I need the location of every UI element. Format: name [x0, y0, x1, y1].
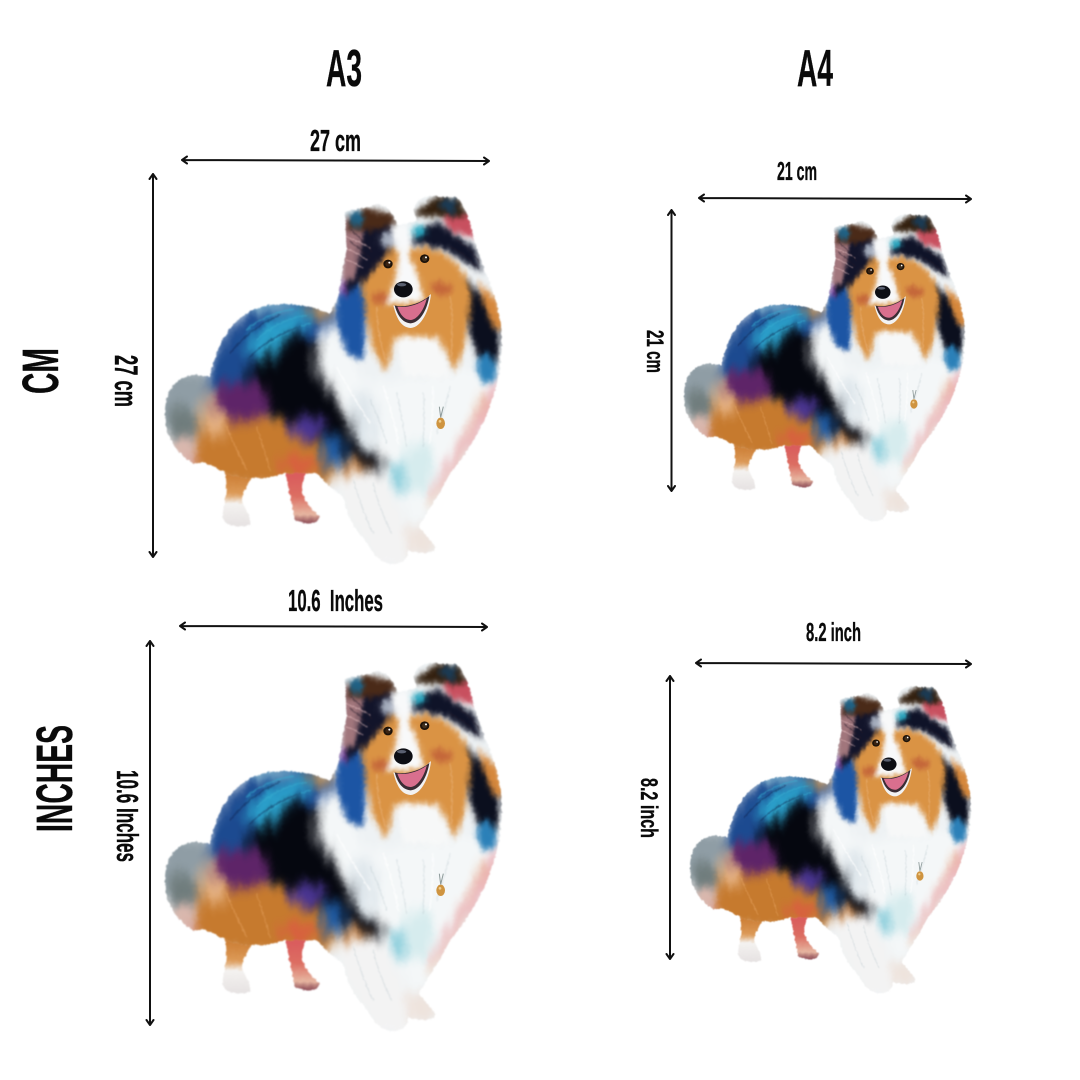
height label: 8.2 inch: 8.2 inch — [635, 778, 662, 838]
height label: 10.6 Inches: 10.6 Inches — [110, 770, 145, 862]
arrow: height — [150, 174, 156, 557]
panel: A3 inches — [110, 583, 510, 1037]
height label: 21 cm: 21 cm — [641, 330, 668, 373]
height label: 27 cm: 27 cm — [108, 355, 144, 407]
illustration: dog A3 cm — [150, 180, 510, 570]
arrow: height — [146, 641, 154, 1025]
illustration: dog A4 inches — [678, 673, 978, 998]
panel: A4 inches — [635, 617, 978, 998]
illustration: dog A4 cm — [672, 201, 972, 526]
arrow: width — [696, 660, 971, 668]
panel: A3 centimetres — [108, 40, 510, 570]
arrow: width — [699, 194, 971, 202]
arrow: height — [668, 210, 675, 491]
heading: A3: A3 — [326, 40, 362, 98]
heading: A4: A4 — [797, 40, 833, 98]
row label: INCHES: INCHES — [26, 725, 83, 832]
panel: A4 centimetres — [641, 40, 972, 526]
row label: CM: CM — [12, 348, 69, 394]
arrow: height — [666, 676, 674, 959]
width label: 21 cm: 21 cm — [777, 156, 817, 186]
arrow: width — [182, 156, 489, 164]
width label: 8.2 inch: 8.2 inch — [806, 617, 861, 647]
illustration: dog A3 inches — [150, 647, 510, 1037]
width label: 10.6 Inches: 10.6 Inches — [288, 583, 383, 618]
arrow: width — [180, 622, 487, 630]
width label: 27 cm: 27 cm — [310, 123, 361, 158]
